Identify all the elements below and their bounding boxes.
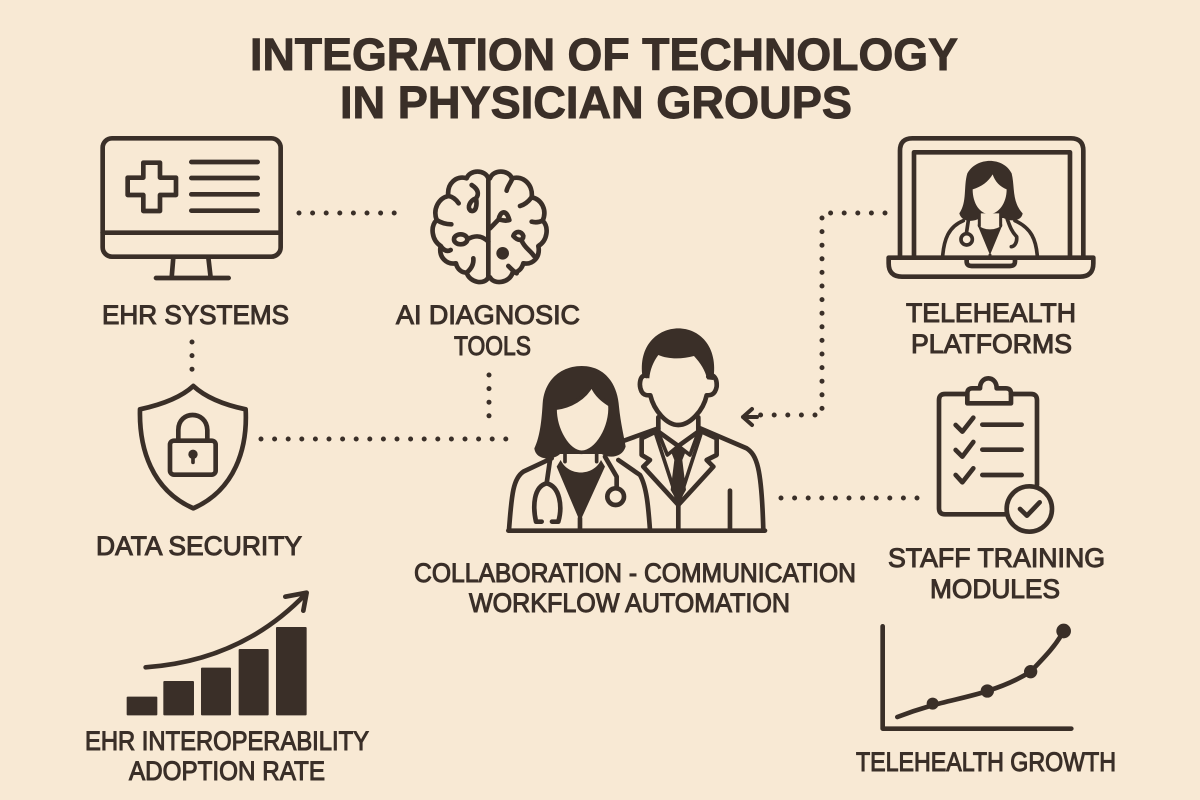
icon: EHR monitor (103, 138, 281, 278)
label: EHR interoperability (85, 726, 369, 786)
title (250, 29, 958, 128)
label: staff training modules (888, 543, 1105, 604)
connector: security to doctors (261, 436, 516, 442)
title: IN PHYSICIAN GROUPS (340, 77, 852, 128)
label: telehealth growth: TELEHEALTH GROWTH (856, 747, 1116, 777)
connector: telehealth to doctors (758, 213, 885, 415)
label: telehealth platforms: PLATFORMS (911, 329, 1072, 359)
label: AI diagnostic tools: AI DIAGNOSIC (396, 300, 580, 330)
icon: security shield (140, 386, 246, 508)
icon: telehealth laptop (889, 138, 1093, 277)
icon: AI brain (433, 172, 547, 282)
arrow head: telehealth connector (743, 409, 757, 425)
label: EHR systems: EHR SYSTEMS (102, 300, 289, 330)
label: data security: DATA SECURITY (96, 531, 302, 561)
connector: EHR to security (190, 342, 194, 372)
label: staff training modules: STAFF TRAINING (888, 543, 1105, 573)
connector: doctors to training (781, 496, 923, 500)
female physician (509, 366, 650, 531)
label: AI diagnostic tools (396, 300, 580, 361)
label: AI diagnostic tools: TOOLS (454, 331, 531, 361)
label: EHR interoperability: ADOPTION RATE (129, 756, 325, 786)
icon: physicians (508, 328, 765, 531)
chart: telehealth growth (883, 624, 1071, 729)
label: EHR interoperability: EHR INTEROPERABILITY (85, 726, 369, 756)
label: telehealth platforms: TELEHEALTH (906, 298, 1076, 328)
connector: EHR to AI (299, 210, 400, 216)
male physician (624, 328, 763, 531)
label: staff training modules: MODULES (930, 574, 1060, 604)
chart: EHR adoption bars (127, 593, 307, 715)
icon: training clipboard (939, 378, 1052, 532)
connector: AI to doctors (486, 375, 492, 428)
label: collaboration and workflow: COLLABORATION - COMMUNICATION (414, 558, 856, 588)
label: telehealth platforms (906, 298, 1076, 359)
label: collaboration and workflow (414, 558, 856, 618)
label: collaboration and workflow: WORKFLOW AUTOMATION (469, 588, 790, 618)
title: INTEGRATION OF TECHNOLOGY (250, 29, 958, 80)
